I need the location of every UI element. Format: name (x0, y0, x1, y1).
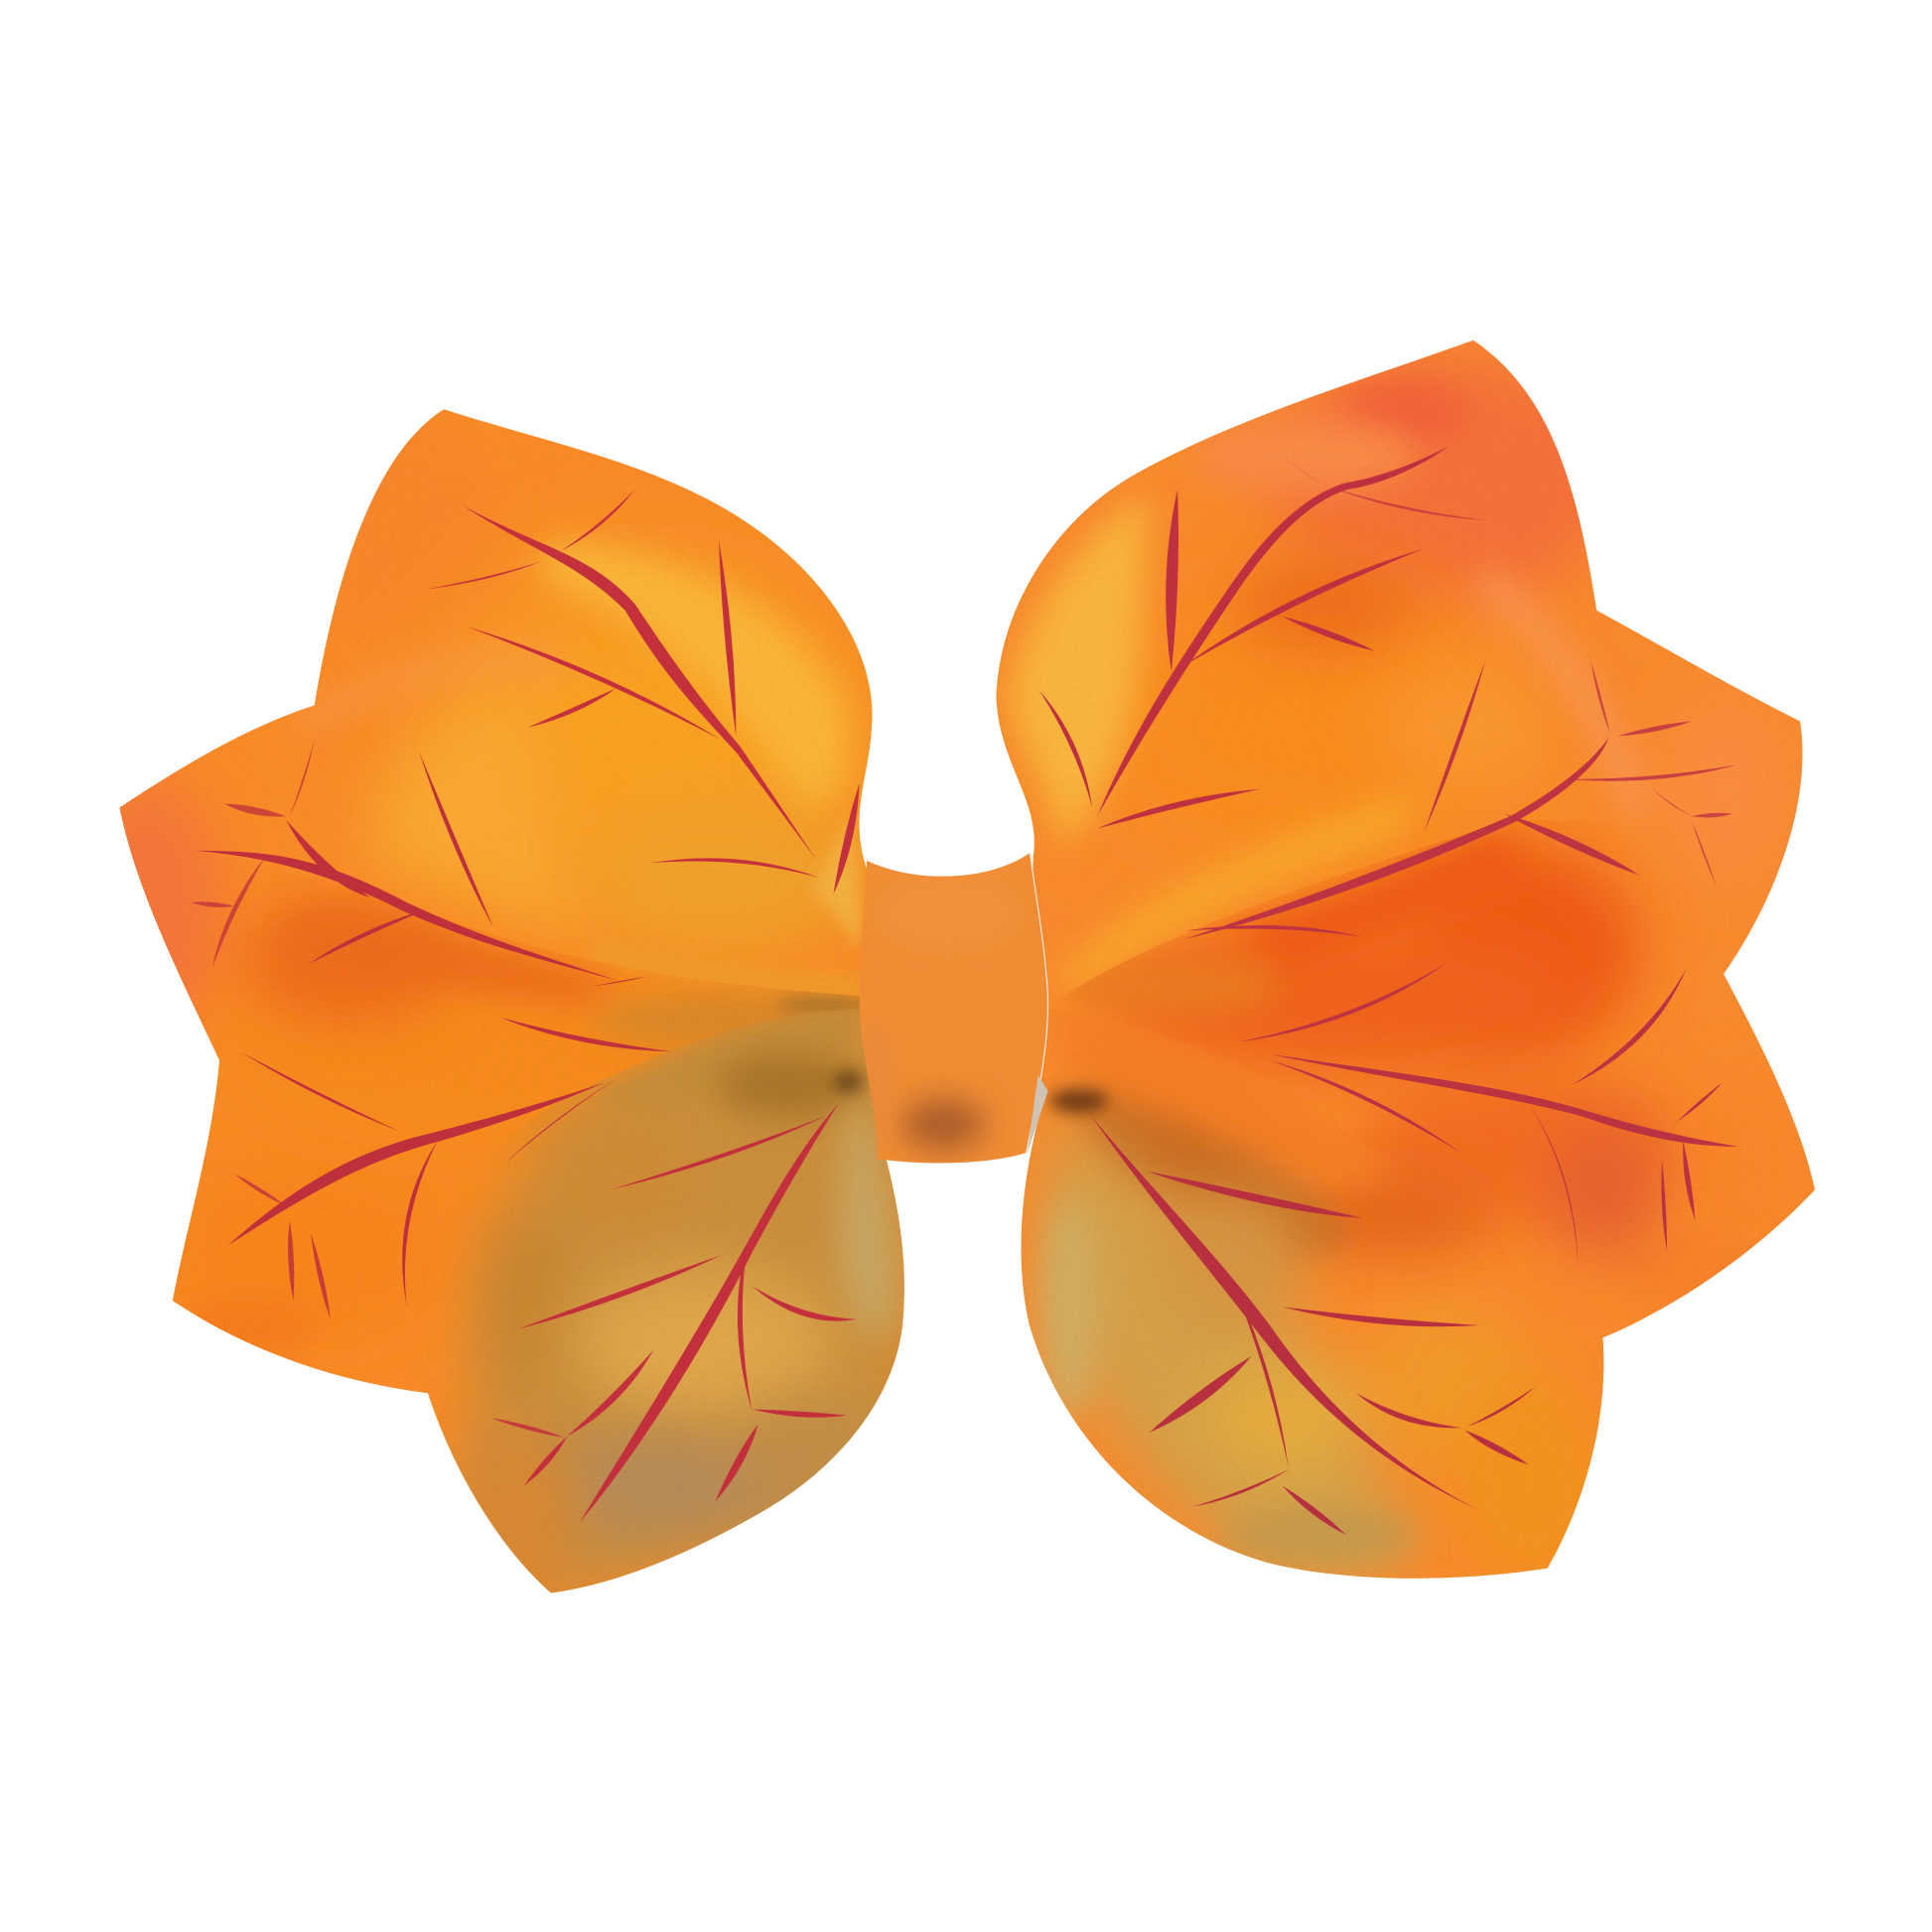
veins: lower left petal (228, 1051, 617, 1319)
veins: bottom right petal (1091, 1116, 1535, 1535)
veins: lower right petal (1270, 968, 1738, 1264)
right wing of the bow (986, 321, 1837, 1590)
leather grain texture: left wing (98, 370, 937, 1615)
veins: middle right petal (1183, 659, 1738, 1041)
leather grain texture: right wing (986, 321, 1837, 1590)
cavity shading: right wing (1060, 829, 1677, 1258)
illustration: orange leaf bow (119, 340, 1815, 1592)
upper lobe and outer tips: right wing (986, 321, 1837, 1590)
sliver of backing under the knot (1027, 1075, 1048, 1154)
cavity shading: left wing (209, 900, 876, 1159)
veins: bottom left petal (490, 1103, 857, 1523)
veins: middle left petal (191, 740, 672, 1051)
center knot band (860, 854, 1048, 1164)
upper lobe and outer tips: left wing (119, 409, 904, 1592)
tan lower lobe: left wing (456, 1011, 924, 1615)
tan lower lobe: right wing (1040, 1009, 1418, 1582)
left wing of the bow (119, 409, 904, 1592)
veins: upper right petal (1039, 438, 1485, 829)
veins: upper left petal (425, 489, 860, 894)
